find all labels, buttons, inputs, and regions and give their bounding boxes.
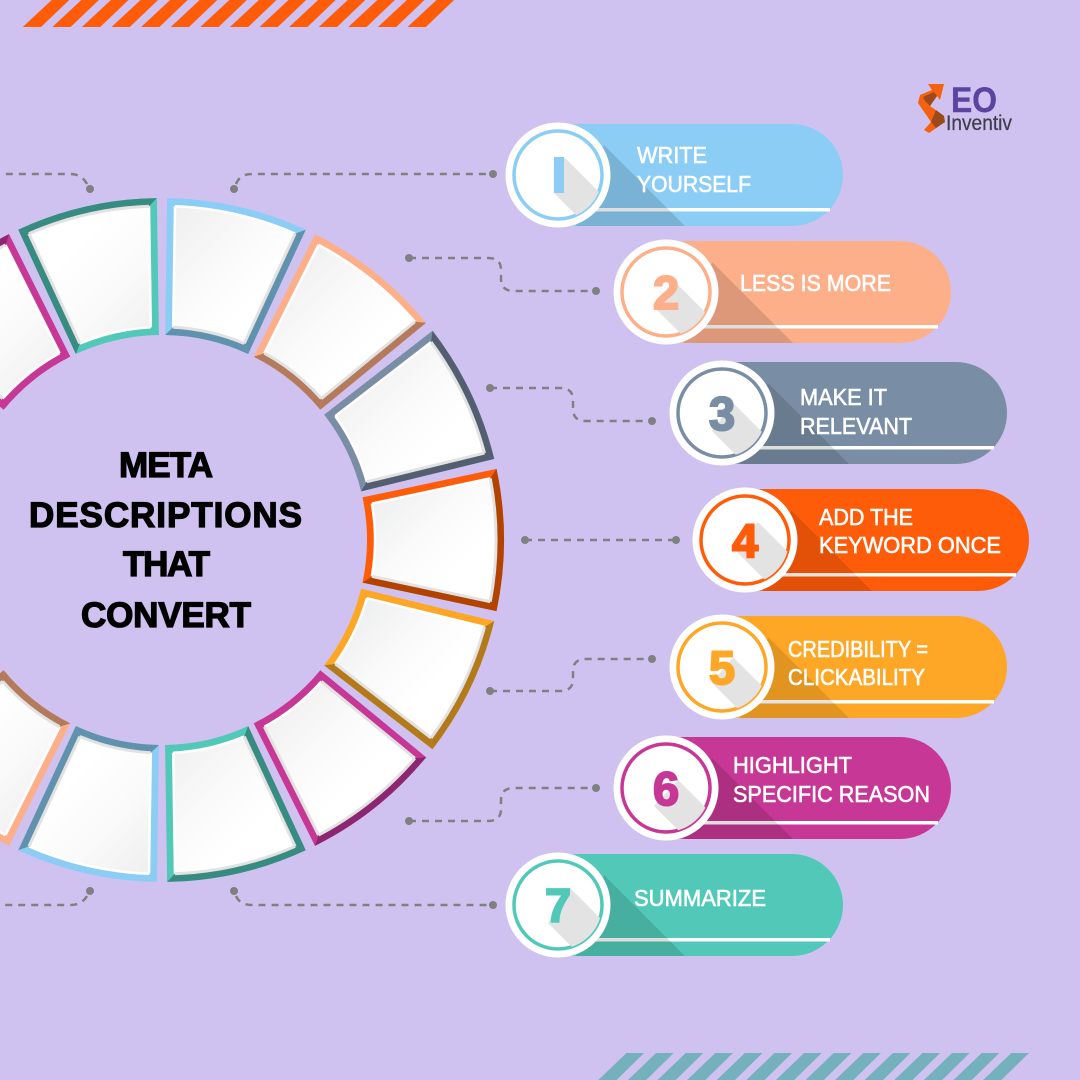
step 3: make it relevant: [670, 360, 1007, 466]
step 4: add the keyword once: [692, 488, 1029, 592]
logo subtitle: Inventiv: [946, 112, 1012, 135]
segment 9 peach: [0, 652, 93, 852]
segment 13 magenta: [0, 228, 93, 428]
segment 5 amber: [312, 563, 501, 752]
step 5: credibility = clickability: CREDIBILITY =: [788, 636, 928, 662]
segment 8 blue: [17, 720, 187, 889]
step 6: highlight specific reason: 6: [653, 762, 679, 815]
bottom teal stripes: [598, 1053, 1029, 1080]
step 1: write yourself: WRITE: [637, 142, 707, 168]
segment 6 magenta: [231, 652, 431, 852]
step 6: highlight specific reason: SPECIFIC REASON: [733, 781, 930, 807]
step 3: make it relevant: RELEVANT: [800, 413, 912, 439]
step 4: add the keyword once: ADD THE: [819, 504, 913, 530]
connector 2: [405, 254, 600, 295]
title: META: [119, 446, 213, 485]
connector 5: [486, 655, 656, 695]
title: [29, 446, 302, 635]
step 5: credibility = clickability: [670, 614, 1007, 720]
connector 6: [405, 784, 600, 825]
logo: SEO Inventiv: [918, 81, 1012, 135]
connector 7: [230, 887, 497, 909]
logo wordmark: EO: [951, 81, 997, 120]
step 2: less is more: [614, 240, 951, 344]
connector 4: [521, 536, 680, 544]
step 2: less is more: LESS IS MORE: [740, 270, 891, 296]
step 3: make it relevant: 3: [709, 387, 735, 440]
step 7: summarize: SUMMARIZE: [634, 885, 766, 911]
step 1: write yourself: 1: [546, 149, 572, 202]
step 6: highlight specific reason: [614, 736, 951, 840]
segment 14 teal: [17, 191, 187, 360]
connector: top left: [0, 174, 94, 193]
step 7: summarize: [506, 852, 843, 958]
step 4: add the keyword once: KEYWORD ONCE: [819, 532, 1001, 558]
title: DESCRIPTIONS: [29, 496, 302, 535]
step 4: add the keyword once: 4: [732, 514, 758, 567]
step 5: credibility = clickability: CLICKABILITY: [788, 664, 925, 690]
step 2: less is more: 2: [653, 266, 679, 319]
step 5: credibility = clickability: 5: [709, 641, 735, 694]
segment 1 blue: [137, 191, 307, 360]
step 1: write yourself: [506, 122, 843, 228]
title: CONVERT: [81, 596, 251, 635]
top orange stripes: [23, 0, 454, 27]
step 1: write yourself: YOURSELF: [637, 171, 751, 197]
icon: orange S arrow: [918, 84, 945, 133]
segment 7 teal: [137, 720, 307, 889]
step 7: summarize: 7: [545, 879, 571, 932]
step 6: highlight specific reason: HIGHLIGHT: [733, 752, 852, 778]
connector 3: [486, 384, 656, 425]
segment 2 peach: [231, 228, 431, 428]
donut ring of segments: [0, 191, 504, 889]
segment 4 orange: [362, 469, 504, 611]
step 3: make it relevant: MAKE IT: [800, 384, 887, 410]
title: THAT: [123, 545, 210, 584]
connector: bottom left: [0, 887, 94, 905]
segment 3 slate: [312, 328, 501, 517]
connector 1: [230, 170, 497, 193]
